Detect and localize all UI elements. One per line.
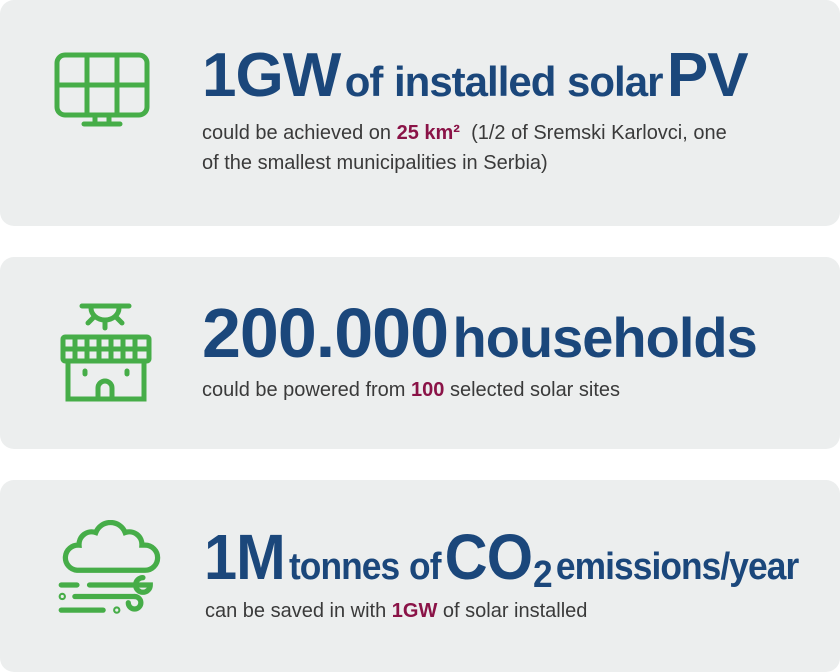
text block: can be saved in with 1GW of solar installed (205, 600, 587, 622)
text block: could be achieved on 25 km² (1/2 of Sremski Karlovci, one (202, 122, 727, 144)
title: 1GW of installed solar PV (202, 41, 748, 110)
title: 200.000 households (202, 294, 757, 372)
title: 1M tonnes of CO2 emissions/year (204, 521, 798, 596)
text block (202, 122, 727, 174)
panel: households (0, 257, 840, 449)
panel: CO2 (0, 480, 840, 672)
text block: could be powered from 100 selected solar sites (202, 379, 620, 401)
icon: solar panel (54, 52, 150, 126)
text block: of the smallest municipalities in Serbia) (202, 152, 548, 174)
icon: house with solar roof (60, 304, 152, 402)
icon: cloud with wind (58, 520, 160, 614)
panel: 1GW solar (0, 0, 840, 226)
